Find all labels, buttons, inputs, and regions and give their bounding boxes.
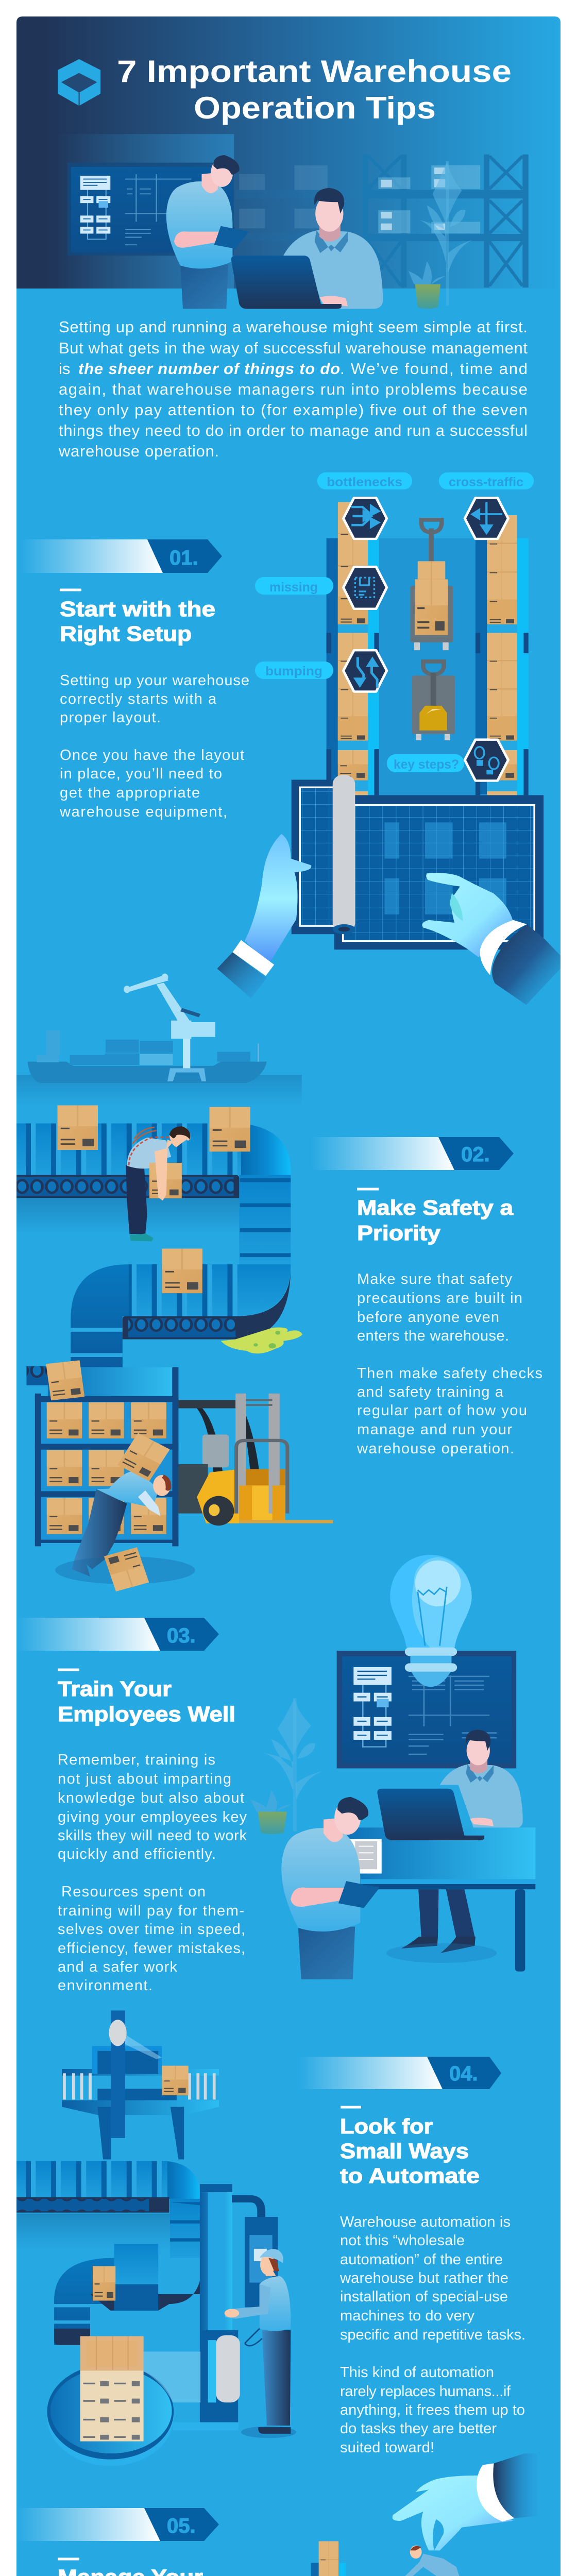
right gloved hand — [422, 873, 561, 1005]
conveyor belt system — [16, 1123, 291, 1367]
section 04 body text: suited toward! — [340, 2439, 434, 2456]
tag: bottlenecks — [317, 472, 412, 489]
section 04 tag banner — [298, 2057, 501, 2089]
section 01 body text: correctly starts with a — [60, 691, 217, 707]
top gloved hand — [393, 2453, 537, 2550]
section 03 body text: efficiency, fewer mistakes, — [58, 1940, 245, 1957]
wall board — [337, 1651, 516, 1768]
standing person — [281, 1797, 380, 1979]
left rack — [327, 502, 379, 795]
section 03 body text: Remember, training is — [58, 1752, 215, 1768]
intro paragraph: again, that warehouse managers run into problems because — [59, 380, 528, 398]
section 04 body text: not this “wholesale — [340, 2232, 465, 2249]
wall board with flowchart — [67, 163, 234, 256]
section 05 heading — [58, 2557, 203, 2576]
section 01 body text: get the appropriate — [60, 785, 200, 801]
section 01 body text — [59, 672, 249, 820]
person seated at laptop — [283, 188, 383, 309]
intro paragraph: But what gets in the way of successful warehouse management — [59, 339, 528, 357]
section 02 body text: and safety training a — [357, 1384, 504, 1400]
intro paragraph: is — [59, 360, 70, 378]
section 01 heading: Start with the — [60, 597, 215, 621]
rotating pallet with wrapped boxes — [47, 2336, 200, 2466]
intro paragraph: . We’ve found, time and — [340, 360, 528, 378]
tag: key steps: key steps? — [394, 757, 459, 772]
section 04 body text: rarely replaces humans...if — [340, 2383, 511, 2400]
conveyor assembly — [16, 2161, 201, 2345]
section 01 heading: Right Setup — [60, 622, 192, 646]
cargo ship illustration — [16, 974, 302, 1106]
icon: bumping hexagon — [343, 650, 387, 691]
section 02 tag banner — [311, 1137, 514, 1170]
section 04 body text: installation of special-use — [340, 2289, 508, 2305]
intro paragraph: warehouse operation. — [58, 442, 219, 460]
section 04 body text: machines to do very — [340, 2308, 475, 2324]
slime spill hazard — [221, 1328, 302, 1353]
section 04 body text: warehouse but rather the — [340, 2270, 508, 2286]
section 05 tag banner: 05. — [167, 2515, 196, 2537]
icon: missing hexagon — [343, 567, 387, 609]
section 02 body text — [357, 1271, 542, 1457]
section 03 heading — [58, 1668, 235, 1726]
section 04 body text — [340, 2214, 525, 2456]
crane — [124, 974, 215, 1081]
pallet jack empty — [412, 662, 455, 740]
section 03 heading: Employees Well — [58, 1702, 235, 1726]
section 04 body text: automation” of the entire — [340, 2251, 503, 2268]
section 01 body text: proper layout. — [60, 709, 161, 726]
section 04 tag banner: 04. — [449, 2062, 478, 2085]
desk — [341, 1827, 535, 1972]
section 01 body text: in place, you’ll need to — [60, 766, 222, 782]
wrapping machine column — [173, 2184, 278, 2431]
section 02 body text: enters the warehouse. — [357, 1328, 509, 1344]
section 01 body text: Once you have the layout — [60, 747, 244, 764]
section 01 tag banner: 01. — [169, 547, 198, 569]
machine operator — [225, 2249, 296, 2438]
light bulb — [390, 1555, 472, 1687]
section 02 heading — [357, 1188, 514, 1245]
section 03 body text: environment. — [58, 1977, 152, 1994]
laptop — [377, 1789, 484, 1840]
section 02 body text: precautions are built in — [357, 1290, 522, 1307]
tag: bumping — [255, 662, 333, 679]
tag: bumping: bumping — [265, 664, 323, 679]
section 02 heading: Priority — [357, 1221, 440, 1245]
section 04 body text: This kind of automation — [340, 2364, 494, 2381]
intro paragraph: Setting up and running a warehouse might seem simple at first. — [59, 318, 528, 336]
shelving unit with boxes — [26, 1360, 178, 1546]
intro paragraph: things they need to do in order to manage and run a successful — [59, 421, 528, 439]
worker bending incorrectly with box — [126, 1126, 191, 1241]
rolled paper tube — [333, 775, 355, 934]
racks and pallet jacks illustration — [327, 502, 529, 798]
intro paragraph: they only pay attention to (for example) five out of the seven — [59, 401, 528, 419]
overhead gantry — [62, 2010, 219, 2159]
automation machine illustration — [16, 2010, 296, 2466]
section 02 body text: Make sure that safety — [357, 1271, 512, 1287]
small dangling worker — [401, 2546, 473, 2576]
section 01 body text: Setting up your warehouse — [60, 672, 249, 689]
laptop — [231, 256, 342, 309]
vertical rack of boxes — [311, 2541, 346, 2576]
problem hexagon icons — [343, 498, 508, 781]
section 02 body text: before anyone even — [357, 1309, 499, 1326]
section 01 body text: warehouse equipment, — [59, 804, 227, 820]
tag: missing — [255, 577, 333, 595]
fallen box — [55, 1547, 195, 1591]
section 03 body text: selves over time in speed, — [58, 1921, 245, 1938]
header banner — [16, 16, 561, 309]
section 03 heading: Train Your — [58, 1677, 172, 1701]
left gloved hand — [217, 834, 311, 998]
title: Operation Tips — [194, 91, 436, 125]
title — [117, 54, 512, 125]
icon: bottlenecks hexagon — [343, 498, 387, 539]
blueprint with hands illustration — [217, 775, 561, 1005]
section 04 body text: do tasks they are better — [340, 2420, 497, 2437]
potted plant — [409, 161, 473, 309]
person standing with tablet — [166, 155, 249, 309]
warehouse scene illustration — [55, 134, 529, 309]
section 03 body text: not just about imparting — [58, 1771, 231, 1787]
section 03 body text: skills they will need to work — [58, 1827, 247, 1844]
intro paragraph — [58, 318, 528, 460]
section 03 body text: giving your employees key — [58, 1809, 247, 1825]
section 04 heading: Look for — [340, 2114, 433, 2138]
blueprint sheet — [292, 779, 544, 950]
section 03 body text: knowledge but also about — [58, 1790, 244, 1806]
seated person — [440, 1730, 523, 1828]
training scene illustration — [250, 1555, 535, 1979]
right rack — [476, 515, 529, 795]
intro paragraph: the sheer number of things to do — [78, 360, 340, 378]
section 03 body text: training will pay for them- — [58, 1903, 244, 1919]
section 03 body text: quickly and efficiently. — [58, 1846, 216, 1862]
section 02 body text: manage and run your — [357, 1421, 512, 1438]
section 02 heading: Make Safety a — [357, 1196, 514, 1219]
section 02 body text: Then make safety checks — [357, 1365, 542, 1382]
forklift — [178, 1394, 333, 1526]
potted plant — [250, 1698, 324, 1834]
section 04 heading: to Automate — [340, 2164, 480, 2188]
tag: key steps — [387, 754, 464, 772]
worker injured carrying box on shoulder — [72, 1433, 171, 1577]
tag: bottlenecks: bottlenecks — [327, 475, 402, 489]
section 03 body text: Resources spent on — [61, 1884, 206, 1900]
section 05 tag banner — [16, 2508, 219, 2541]
conveyor, workers and forklift illustration — [16, 1105, 333, 1577]
tag: cross-traffic — [439, 472, 534, 489]
section 04 body text: Warehouse automation is — [340, 2214, 511, 2230]
tag: cross-traffic: cross-traffic — [449, 475, 523, 489]
section 02 body text: warehouse operation. — [357, 1440, 514, 1457]
section 04 heading — [340, 2106, 480, 2188]
tag: missing: missing — [269, 580, 318, 595]
pallet jack with boxes — [410, 520, 453, 650]
icon: cross-traffic hexagon — [465, 498, 508, 539]
icon: infoplus hexagon logo — [58, 59, 100, 106]
section 02 body text: regular part of how you — [357, 1402, 527, 1419]
section 03 tag banner: 03. — [167, 1624, 196, 1647]
title: 7 Important Warehouse — [117, 54, 512, 89]
employee management illustration — [221, 2541, 525, 2576]
section 04 body text: anything, it frees them up to — [340, 2402, 525, 2418]
section 04 heading: Small Ways — [340, 2139, 469, 2163]
section 01 heading — [60, 588, 215, 646]
section 03 body text — [58, 1752, 247, 1994]
open book — [348, 1839, 382, 1874]
background shelving — [235, 155, 529, 287]
section 03 body text: and a safer work — [58, 1959, 177, 1975]
section 03 tag banner — [16, 1618, 219, 1651]
section 01 tag banner — [21, 539, 222, 573]
section 04 body text: specific and repetitive tasks. — [340, 2327, 525, 2343]
icon: key steps hexagon — [465, 740, 508, 781]
boxes on conveyor — [57, 1105, 250, 1293]
hand dangling worker — [393, 2453, 537, 2576]
section 02 tag banner: 02. — [461, 1143, 490, 1166]
